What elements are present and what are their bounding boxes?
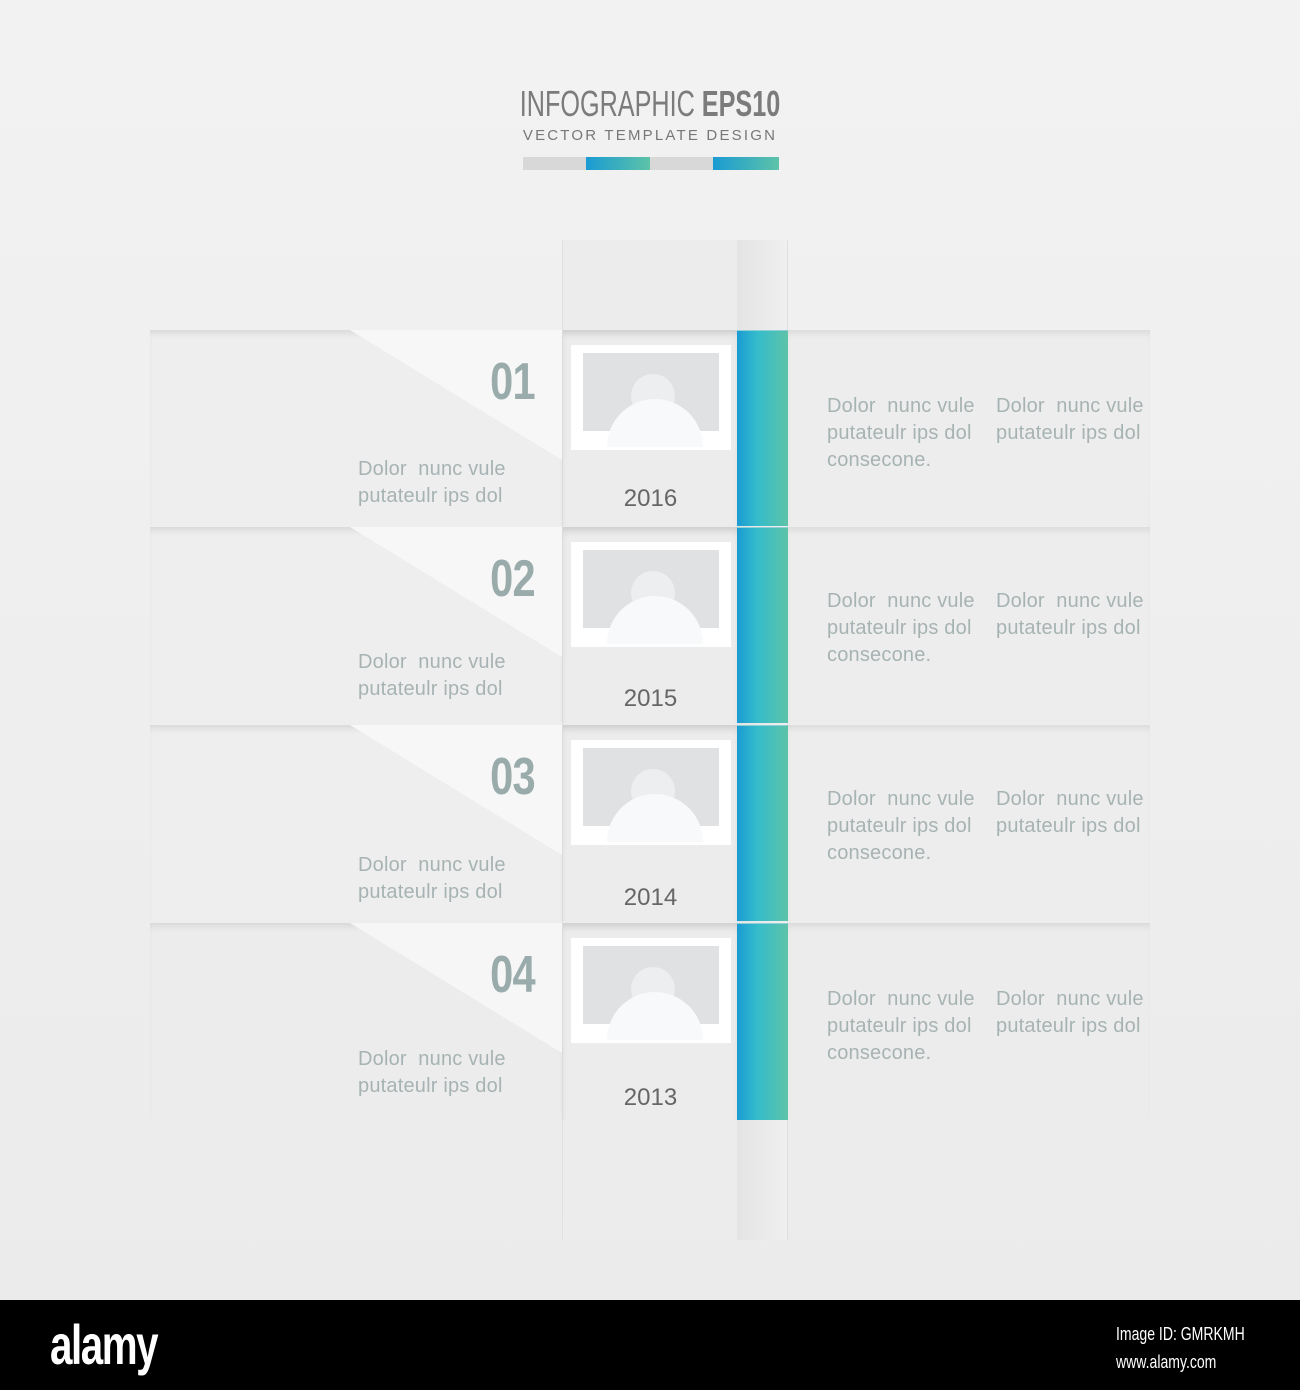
right text: putateulr ips dol: [827, 1015, 972, 1037]
right text: consecone.: [827, 1042, 931, 1064]
number: 03: [490, 748, 535, 806]
left text: putateulr ips dol: [358, 678, 503, 700]
title: [520, 83, 780, 144]
footer logo: alamy: [50, 1313, 157, 1376]
row 04: Dolor nunc vule: [996, 988, 1144, 1010]
right text: putateulr ips dol: [827, 815, 972, 837]
light wedge: [350, 527, 562, 657]
photo: 2014: [624, 884, 677, 911]
left text: [358, 854, 506, 903]
photo: [562, 527, 737, 723]
right text: consecone.: [827, 449, 931, 471]
footer id: [1116, 1324, 1245, 1372]
timeline bar: [737, 330, 788, 526]
photo: [562, 923, 737, 1120]
row 01: [150, 330, 1150, 526]
right text: consecone.: [827, 842, 931, 864]
light wedge: [350, 923, 562, 1053]
photo: [562, 330, 737, 526]
title: VECTOR TEMPLATE DESIGN: [523, 127, 777, 144]
left text: Dolor nunc vule: [358, 1048, 506, 1070]
row 01: putateulr ips dol: [996, 422, 1141, 444]
row 02: [150, 527, 1150, 723]
right text: putateulr ips dol: [827, 617, 972, 639]
number: 02: [490, 550, 535, 608]
right text: [827, 590, 975, 666]
vertical column strips: [562, 240, 737, 1240]
timeline bar: [737, 725, 788, 921]
row 01: Dolor nunc vule: [996, 395, 1144, 417]
right text: [827, 988, 975, 1064]
number: 04: [490, 946, 535, 1004]
right text: putateulr ips dol: [827, 422, 972, 444]
footer id: www.alamy.com: [1116, 1352, 1216, 1372]
right text: Dolor nunc vule: [827, 395, 975, 417]
light wedge: [350, 725, 562, 855]
right text: [827, 395, 975, 471]
left text: Dolor nunc vule: [358, 854, 506, 876]
photo: [562, 725, 737, 921]
title: INFOGRAPHIC EPS10: [520, 83, 780, 124]
right text: Dolor nunc vule: [827, 988, 975, 1010]
photo: 2015: [624, 685, 677, 712]
row 03: [150, 725, 1150, 921]
right text: Dolor nunc vule: [827, 788, 975, 810]
left text: [358, 1048, 506, 1097]
photo: 2013: [624, 1084, 677, 1111]
title bar: [523, 157, 779, 170]
right text: Dolor nunc vule: [827, 590, 975, 612]
photo: 2016: [624, 485, 677, 512]
left text: putateulr ips dol: [358, 485, 503, 507]
left text: Dolor nunc vule: [358, 458, 506, 480]
left text: putateulr ips dol: [358, 1075, 503, 1097]
row 04: [150, 923, 1150, 1120]
number: 01: [490, 353, 535, 411]
timeline bar: [737, 923, 788, 1120]
row 04: putateulr ips dol: [996, 1015, 1141, 1037]
left text: putateulr ips dol: [358, 881, 503, 903]
footer id: Image ID: GMRKMH: [1116, 1324, 1245, 1344]
right text: [827, 788, 975, 864]
left text: Dolor nunc vule: [358, 651, 506, 673]
right text: consecone.: [827, 644, 931, 666]
light wedge: [350, 330, 562, 460]
left text: [358, 651, 506, 700]
row 02: Dolor nunc vule: [996, 590, 1144, 612]
row 03: putateulr ips dol: [996, 815, 1141, 837]
row 02: putateulr ips dol: [996, 617, 1141, 639]
timeline bar: [737, 527, 788, 723]
left text: [358, 458, 506, 507]
footer: [0, 1300, 1300, 1390]
row 03: Dolor nunc vule: [996, 788, 1144, 810]
